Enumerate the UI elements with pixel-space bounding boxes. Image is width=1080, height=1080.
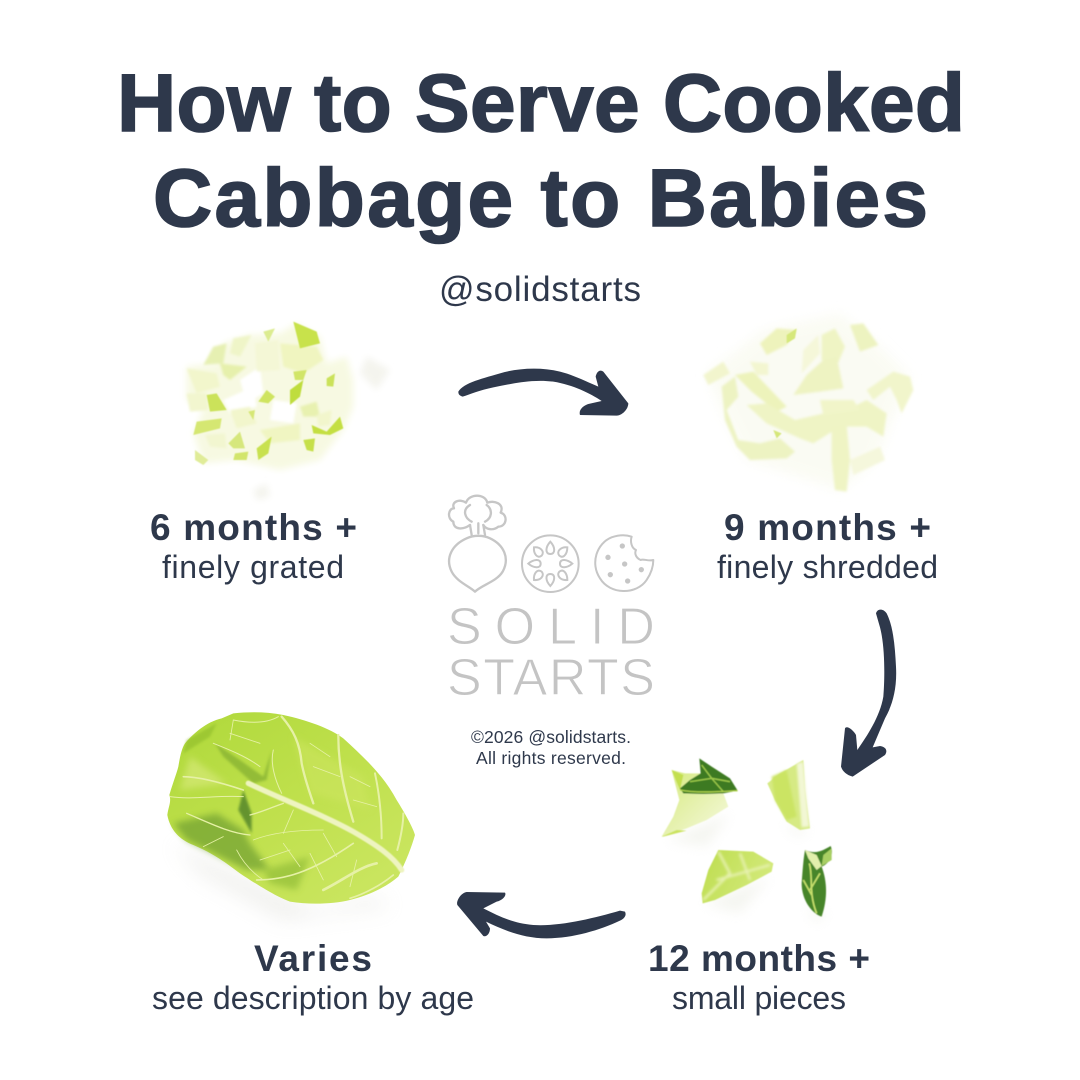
image: finely shredded cabbage: [703, 313, 913, 492]
label: 9 months: finely shredded: [717, 549, 938, 585]
piece: top right: [767, 760, 810, 830]
title: How to Serve Cooked: [117, 58, 965, 149]
label: 9 months: [717, 507, 938, 585]
handle: @solidstarts: [439, 270, 641, 309]
image: finely grated cabbage: [187, 322, 390, 500]
label: varies: Varies: [254, 938, 372, 979]
label: varies: see description by age: [152, 980, 474, 1016]
title: Cabbage to Babies: [153, 153, 928, 244]
arrow: 12 months to varies: [457, 892, 626, 938]
label: 6 months: [150, 507, 357, 585]
piece: bottom right: [802, 846, 832, 917]
piece: bottom left: [702, 850, 773, 903]
label: 12 months: 12 months +: [648, 938, 870, 979]
label: 9 months: 9 months +: [724, 507, 931, 548]
leaf veins: [170, 717, 403, 898]
logo: Solid Starts: [447, 496, 655, 707]
label: 6 months: 6 months +: [150, 507, 357, 548]
copyright: [471, 727, 631, 768]
wordmark: [447, 598, 655, 707]
label: varies: [152, 938, 474, 1016]
piece: top left: [662, 758, 738, 837]
label: 12 months: small pieces: [672, 980, 846, 1016]
icon: cucumber slice: [522, 535, 579, 592]
label: 12 months: [648, 938, 870, 1016]
copyright: ©2026 @solidstarts.: [471, 727, 631, 747]
icon: beet: [449, 496, 506, 592]
arrow: 9 months to 12 months: [841, 610, 896, 777]
arrow: 6 months to 9 months: [458, 369, 628, 416]
wordmark: SOLID: [447, 598, 655, 656]
image: small cabbage pieces: [662, 758, 832, 923]
wordmark: STARTS: [447, 649, 655, 707]
leaf shading: [173, 723, 370, 890]
icon: cookie: [595, 535, 653, 591]
title: [117, 58, 965, 244]
copyright: All rights reserved.: [476, 748, 626, 768]
label: 6 months: finely grated: [162, 549, 344, 585]
image: whole cabbage leaf: [167, 712, 415, 920]
